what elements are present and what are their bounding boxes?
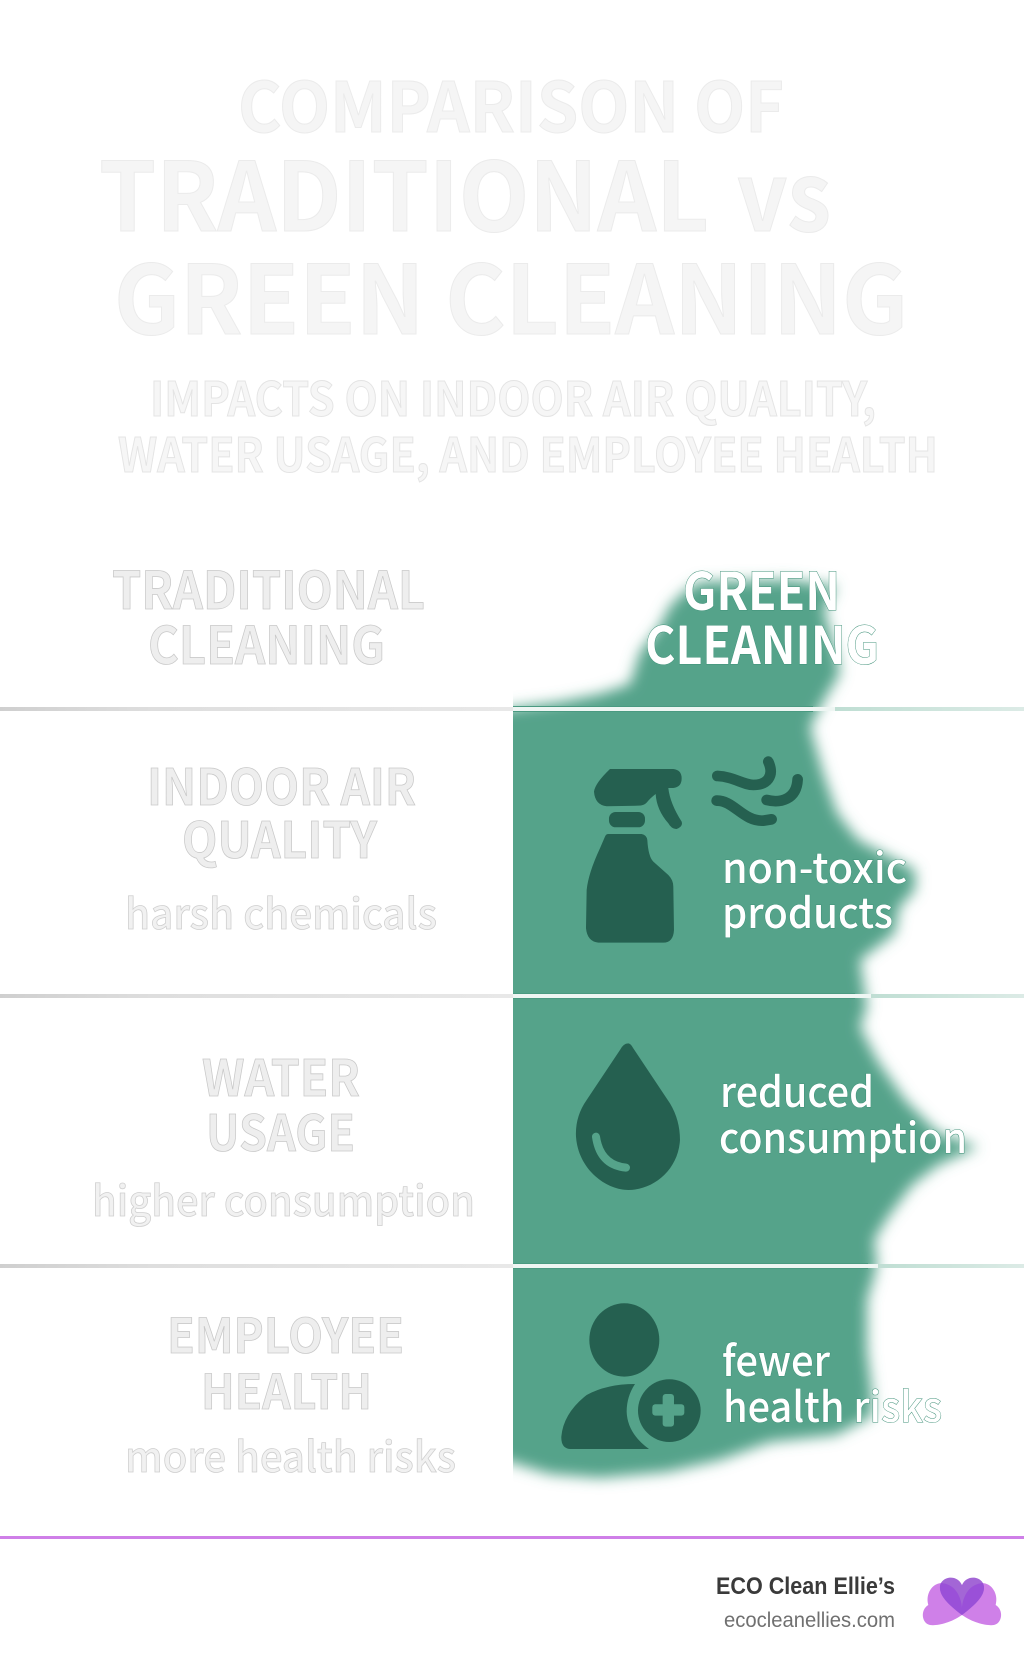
title: vs — [737, 122, 831, 259]
heading: green cleaning — [645, 550, 879, 679]
panel: traditional indoor air quality — [125, 748, 437, 942]
text: fewer health risks — [722, 1328, 942, 1435]
divider: header row — [0, 706, 1024, 712]
subtitle — [118, 361, 938, 486]
icon: purple heart logo — [923, 1578, 1001, 1625]
heading: green cleaning: GREEN — [683, 550, 840, 625]
panel: traditional indoor air quality: INDOOR AIR — [147, 748, 416, 820]
panel: green cleaning column background — [480, 580, 978, 1478]
text: non-toxic products: non-toxic — [722, 835, 907, 896]
heading: traditional cleaning — [112, 549, 425, 679]
text: reduced consumption: reduced — [720, 1059, 874, 1120]
panel: traditional indoor air quality: harsh chemicals — [125, 881, 437, 942]
panel: traditional indoor air quality: QUALITY — [182, 801, 378, 873]
panel: traditional employee health: HEALTH — [201, 1353, 372, 1423]
subtitle: IMPACTS ON INDOOR AIR QUALITY, — [150, 361, 876, 430]
icon: person with plus — [561, 1303, 701, 1449]
panel: traditional water usage: higher consumption — [92, 1168, 475, 1229]
heading: traditional cleaning: TRADITIONAL — [112, 549, 425, 624]
text: reduced consumption: consumption — [719, 1105, 967, 1166]
text: fewer health risks: fewer — [722, 1328, 831, 1389]
icon: spray bottle — [586, 769, 682, 943]
footer brand text: ECO Clean Ellie’s — [716, 1573, 895, 1600]
footer divider line — [0, 1536, 1024, 1539]
heading: green cleaning: CLEANING — [645, 604, 879, 679]
text: non-toxic products: products — [722, 880, 893, 941]
text: reduced consumption — [719, 1059, 967, 1166]
divider: indoor air row — [0, 993, 1024, 999]
icon: water drop — [576, 1043, 680, 1190]
heading: traditional cleaning: CLEANING — [148, 604, 385, 679]
panel: traditional employee health: EMPLOYEE — [167, 1297, 404, 1367]
footer brand text — [716, 1573, 895, 1632]
title — [99, 52, 908, 362]
title: GREEN CLEANING — [114, 225, 908, 362]
subtitle: WATER USAGE, AND EMPLOYEE HEALTH — [118, 417, 938, 486]
title: COMPARISON OF — [238, 52, 784, 152]
panel: traditional water usage — [92, 1039, 475, 1229]
icon: air wisps — [717, 762, 798, 821]
panel: traditional water usage: USAGE — [206, 1094, 355, 1166]
title: TRADITIONAL — [99, 122, 709, 259]
footer brand text: ecocleanellies.com — [724, 1609, 895, 1632]
text: fewer health risks: health risks — [723, 1374, 942, 1435]
panel: traditional employee health: more health risks — [125, 1424, 456, 1485]
divider: water row — [0, 1263, 1024, 1269]
panel: traditional water usage: WATER — [202, 1039, 360, 1111]
panel: traditional employee health — [125, 1297, 456, 1485]
text: non-toxic products — [722, 835, 907, 941]
